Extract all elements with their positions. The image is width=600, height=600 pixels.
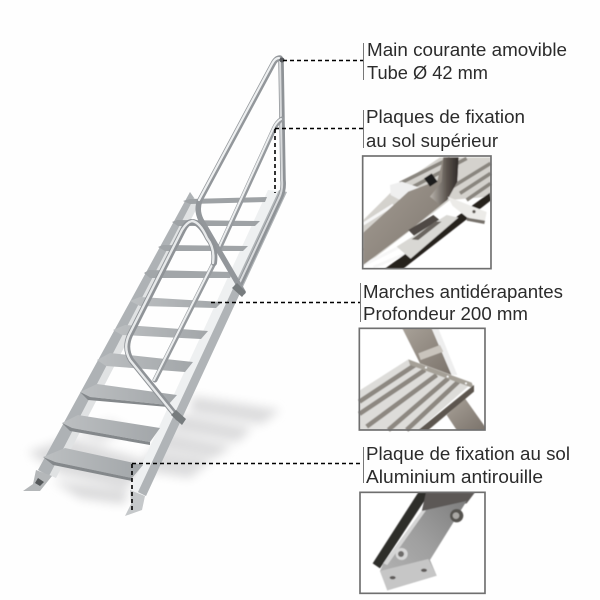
tread 6 — [130, 297, 222, 308]
label text: au sol supérieur — [366, 131, 498, 151]
leader line — [283, 60, 363, 62]
tread 8 — [158, 245, 248, 251]
panel frame — [360, 492, 485, 593]
label bar — [363, 110, 364, 148]
tread 10 — [183, 197, 267, 204]
tread 5 — [113, 325, 208, 339]
label text: Marches antidérapantes — [363, 282, 563, 302]
callout: non-slip treads — [211, 282, 563, 324]
label bar — [363, 43, 364, 80]
label text — [366, 107, 525, 151]
label text: Plaques de fixation — [366, 107, 525, 127]
callout: upper fixing plates — [275, 107, 525, 193]
upper strut — [402, 328, 452, 375]
photo panel: non-slip tread — [359, 328, 485, 430]
leader line — [275, 128, 363, 193]
handrail clamps — [171, 58, 284, 425]
callout: removable handrail — [283, 40, 567, 83]
callout: ground fixing plate — [132, 444, 570, 512]
tread slats — [359, 365, 458, 430]
label text: Main courante amovible — [367, 40, 567, 60]
white bracket — [390, 182, 422, 200]
label bar — [360, 283, 361, 322]
steel plate — [380, 501, 467, 590]
label text: Aluminium antirouille — [366, 467, 543, 487]
label text — [366, 444, 570, 487]
removable handrail — [126, 58, 283, 418]
leader line — [132, 464, 363, 512]
big tube — [363, 157, 459, 265]
tread slats — [363, 157, 491, 267]
label bar — [363, 447, 364, 483]
dark rail — [385, 193, 491, 269]
bolts and holes — [450, 509, 463, 522]
leader line — [211, 302, 360, 304]
photo panel: ground fixing plate — [360, 492, 485, 593]
tread 2 — [62, 415, 160, 442]
label text: Profondeur 200 mm — [363, 304, 528, 324]
tread 4 — [97, 353, 193, 372]
label text: Tube Ø 42 mm — [367, 63, 488, 83]
panel frame — [363, 156, 491, 269]
tread 3 — [80, 384, 177, 405]
tread edge — [408, 359, 474, 388]
dark profile — [373, 492, 430, 568]
bottom bar — [397, 215, 458, 259]
panel frame — [359, 328, 485, 430]
clamp detail — [408, 215, 442, 238]
label text — [363, 282, 563, 324]
right stringer — [125, 190, 287, 516]
tread 9 — [172, 220, 260, 226]
right bracket — [448, 197, 487, 221]
left stringer — [23, 192, 199, 491]
label text: Plaque de fixation au sol — [366, 444, 570, 464]
staircase illustration — [23, 58, 287, 516]
tread 7 — [144, 270, 233, 278]
photo panel: upper fixing plates — [363, 156, 491, 269]
label text — [367, 40, 567, 83]
tread 1 — [43, 448, 143, 478]
stair treads — [43, 197, 267, 481]
tread base — [359, 359, 472, 430]
lower leg — [447, 398, 485, 430]
floor shadow — [28, 396, 280, 504]
